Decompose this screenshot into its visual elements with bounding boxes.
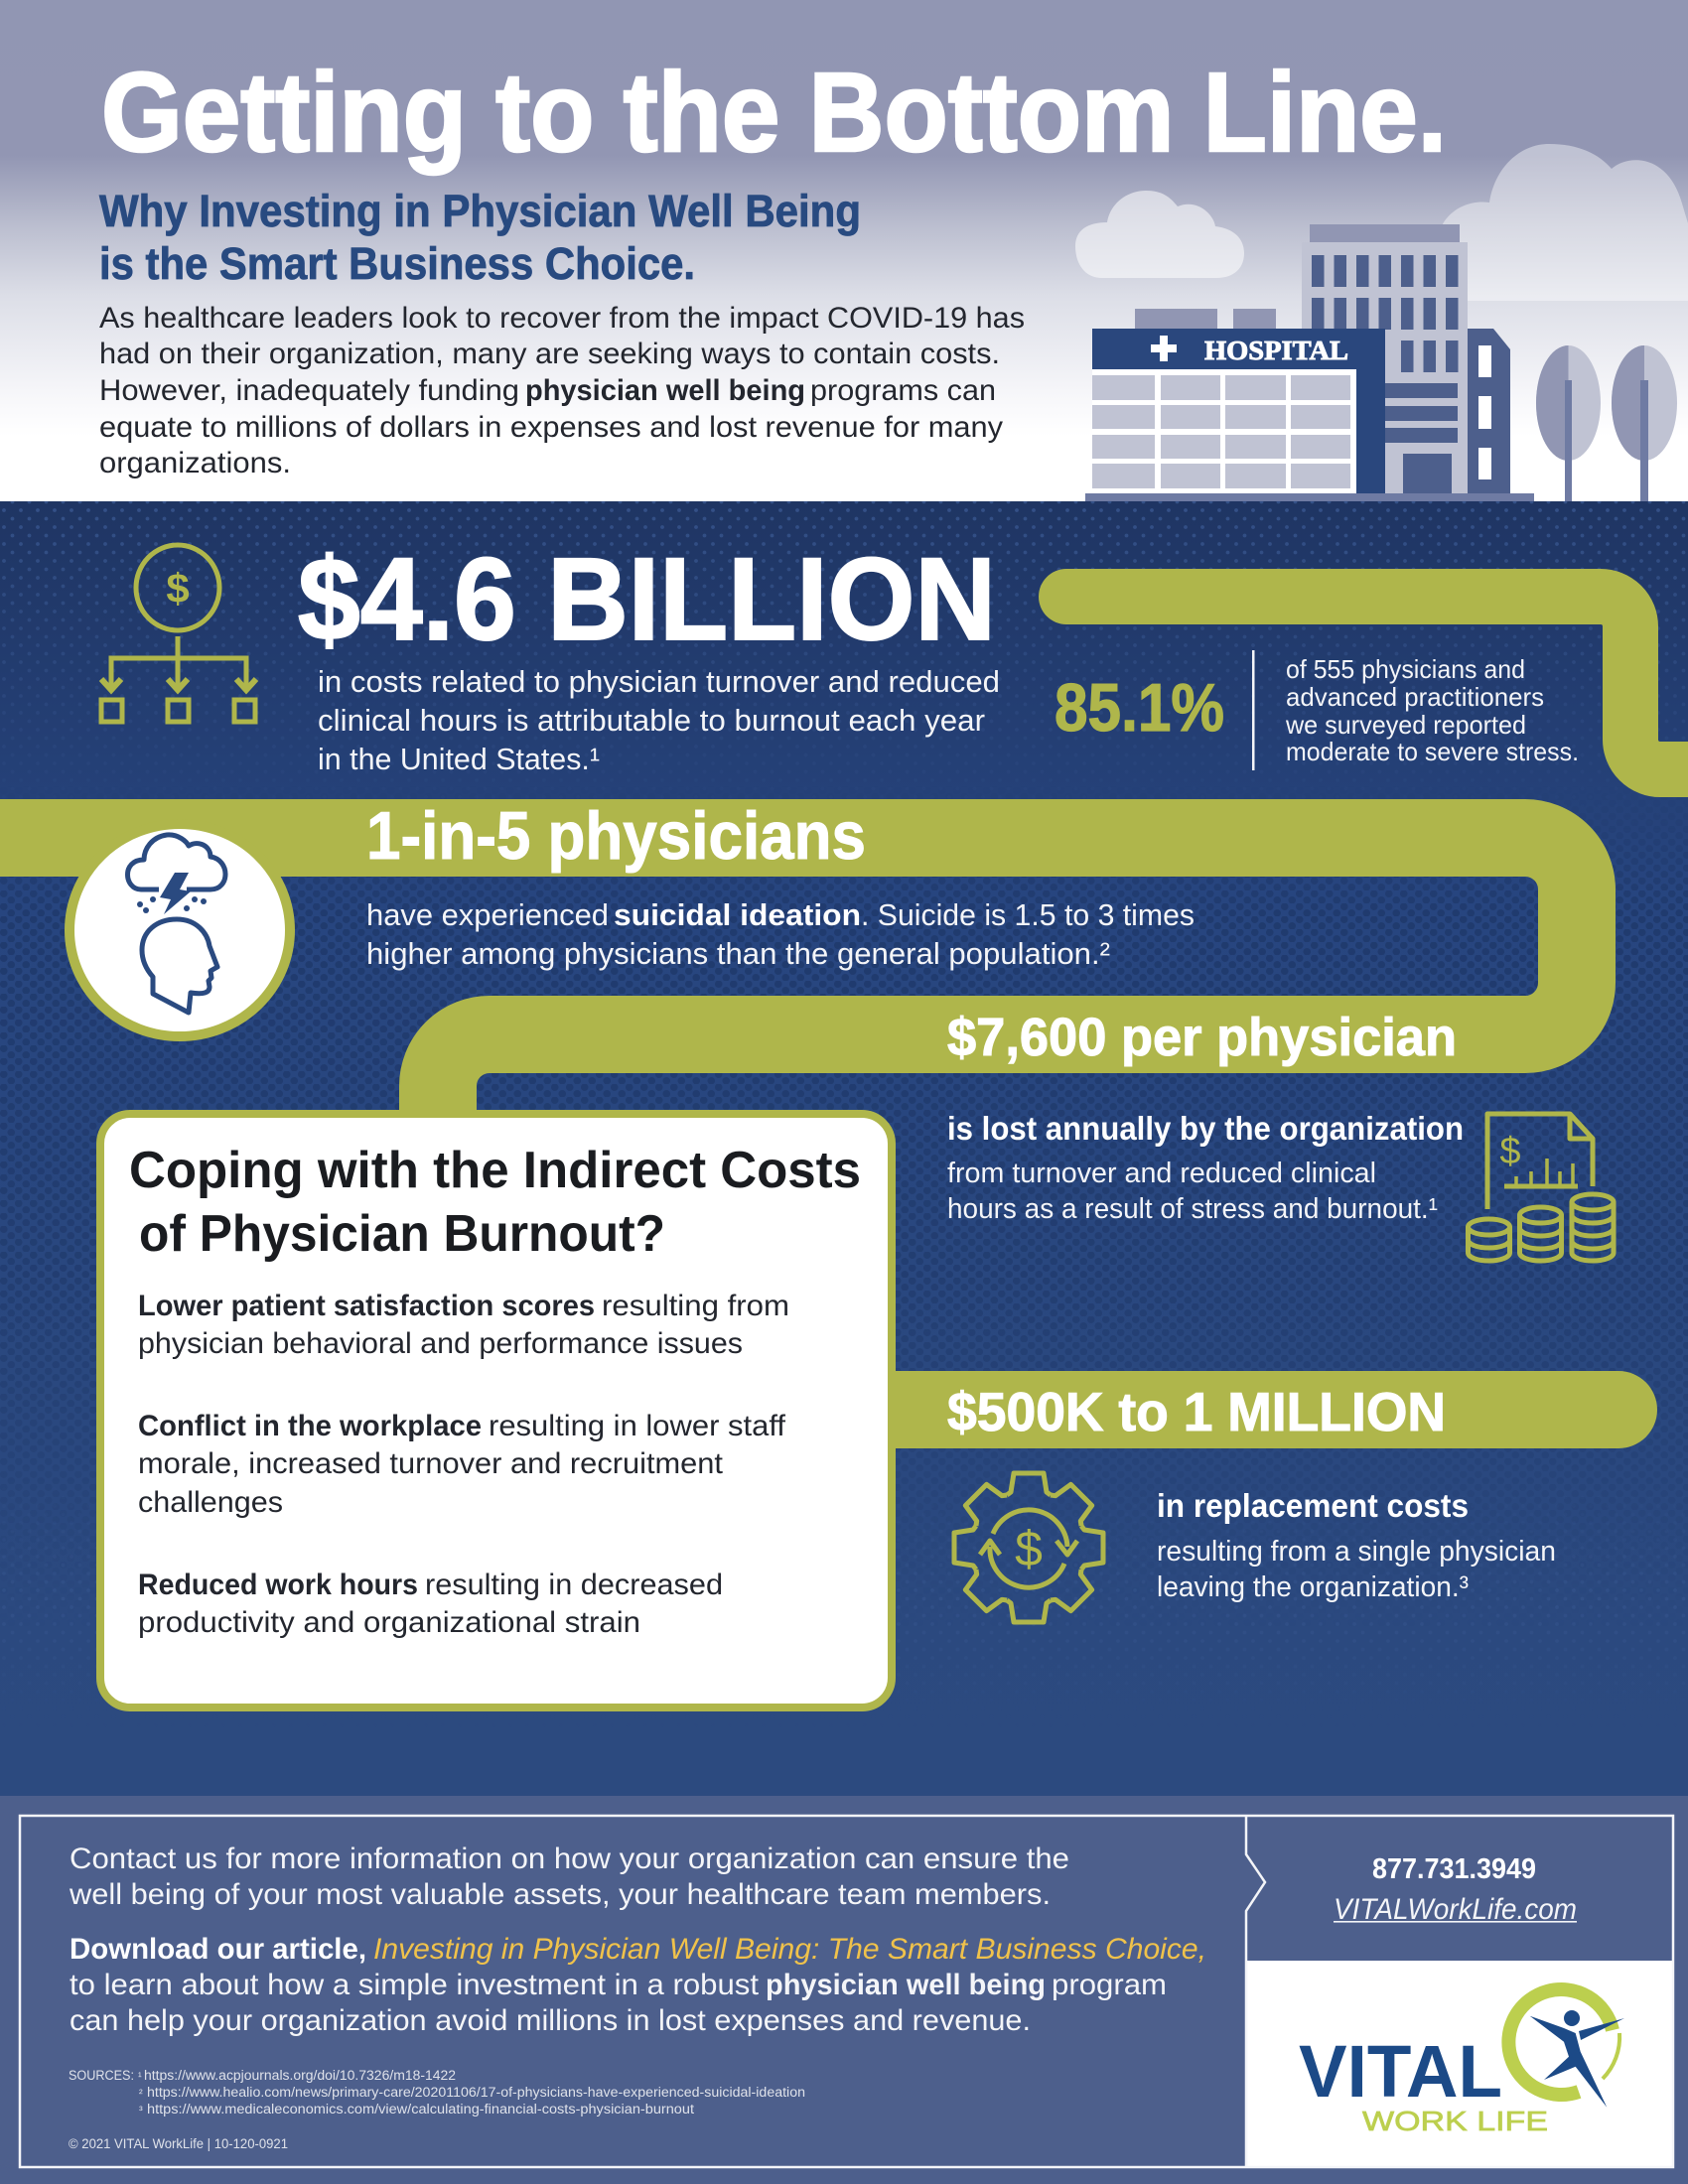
panel heading: of Physician Burnout? — [139, 1205, 665, 1263]
text: 85.1% description: advanced practitioners — [1286, 682, 1544, 712]
footer article text: physician well being — [766, 1969, 1046, 2001]
logo: VITAL WorkLife — [1299, 1989, 1624, 2136]
text: 7,600 description: is lost annually by the organization — [947, 1110, 1464, 1147]
illustration: trees — [1536, 345, 1677, 501]
item: conflict in the workplace — [138, 1410, 786, 1519]
footer article text: Download our article, — [70, 1933, 366, 1966]
ribbon 2 — [0, 838, 1577, 1132]
divider — [1252, 650, 1255, 770]
navy background panel — [0, 501, 1688, 1796]
footer contact text — [69, 1843, 1069, 1911]
text: replacement costs: resulting from a single physician — [1157, 1536, 1556, 1568]
footer article text — [70, 1933, 1206, 2037]
item: conflict in the workplace: challenges — [138, 1486, 283, 1519]
text: 85.1% description: we surveyed reported — [1285, 710, 1526, 740]
item: lower patient satisfaction: physician behavioral and performance issues — [138, 1327, 743, 1360]
sources: ² — [139, 2088, 143, 2100]
footer contact text: well being of your most valuable assets, your healthcare team members. — [69, 1878, 1051, 1911]
item: conflict in the workplace: Conflict in the workplace — [138, 1410, 482, 1442]
footer article text: can help your organization avoid millions in lost expenses and revenue. — [70, 2004, 1031, 2037]
phone number: 877.731.3949 — [1372, 1853, 1536, 1885]
footer panel — [0, 1796, 1688, 2184]
subtitle: Why Investing in Physician Well Being — [99, 186, 861, 236]
icon: dollar hierarchy: $ — [166, 565, 190, 612]
text: suicidal ideation: higher among physicians than the general population.² — [366, 936, 1110, 971]
icon: head under storm cloud — [70, 824, 290, 1036]
item: conflict in the workplace: resulting in lower staff — [489, 1410, 786, 1442]
item: reduced work hours — [138, 1569, 723, 1639]
item: lower patient satisfaction — [138, 1290, 789, 1360]
sources: ¹ — [138, 2071, 142, 2083]
stat: 7,600 per physician: $7,600 per physician — [947, 1008, 1457, 1067]
item: lower patient satisfaction: Lower patient satisfaction scores — [138, 1290, 595, 1322]
ribbon 1 — [1066, 597, 1688, 769]
text: 7,600 description: hours as a result of stress and burnout.¹ — [947, 1193, 1438, 1225]
text: 4.6 billion description: in the United States.¹ — [318, 742, 600, 776]
logo: VITAL WorkLife: WORK LIFE — [1362, 2106, 1548, 2136]
text: suicidal ideation: suicidal ideation — [614, 897, 861, 932]
sources: https://www.medicaleconomics.com/view/calculating-financial-costs-physician-burnout — [147, 2102, 694, 2116]
text: 85.1% description: moderate to severe stress. — [1286, 737, 1579, 766]
panel heading — [129, 1142, 861, 1263]
stat: 85.1%: 85.1% — [1055, 670, 1224, 746]
item: reduced work hours: Reduced work hours — [138, 1569, 418, 1601]
stat: 500K to 1 million: $500K to 1 MILLION — [947, 1381, 1446, 1442]
illustration: hospital: HOSPITAL — [1204, 336, 1348, 365]
intro text: physician well being — [525, 374, 805, 407]
text: replacement costs: leaving the organization.³ — [1157, 1571, 1469, 1603]
text: suicidal ideation — [366, 897, 1195, 971]
footer contact text: Contact us for more information on how your organization can ensure the — [70, 1843, 1069, 1875]
subtitle: is the Smart Business Choice. — [99, 238, 695, 289]
text: replacement costs — [1157, 1487, 1556, 1603]
icon: financial report and coins: $ — [1499, 1131, 1521, 1172]
cloud: large right — [1439, 144, 1688, 301]
text: 4.6 billion description — [318, 664, 1000, 776]
intro text: equate to millions of dollars in expenses and lost revenue for many — [99, 411, 1003, 444]
intro text — [99, 302, 1025, 479]
copyright: © 2021 VITAL WorkLife | 10-120-0921 — [69, 2136, 288, 2151]
text: 4.6 billion description: in costs related to physician turnover and reduced — [318, 664, 1000, 699]
footer article text: Investing in Physician Well Being: The Smart Business Choice, — [373, 1933, 1206, 1966]
intro text: However, inadequately funding — [99, 374, 519, 407]
sources: SOURCES: — [69, 2068, 134, 2083]
stat: 1-in-5 physicians: 1-in-5 physicians — [366, 798, 866, 874]
item: conflict in the workplace: morale, increased turnover and recruitment — [138, 1447, 724, 1480]
text: 85.1% description: of 555 physicians and — [1286, 654, 1525, 684]
intro text: had on their organization, many are seeking ways to contain costs. — [99, 338, 1000, 370]
intro text: organizations. — [99, 447, 291, 479]
text: 4.6 billion description: clinical hours is attributable to burnout each year — [318, 703, 985, 738]
icon: dollar hierarchy — [101, 545, 256, 722]
header background — [0, 0, 1688, 501]
panel heading: Coping with the Indirect Costs — [129, 1142, 861, 1199]
illustration: hospital — [1085, 224, 1534, 501]
subtitle — [99, 186, 861, 289]
icon: gear with dollar — [954, 1473, 1103, 1622]
text: suicidal ideation: have experienced — [366, 897, 609, 932]
item: reduced work hours: productivity and organizational strain — [138, 1606, 640, 1639]
text: replacement costs: in replacement costs — [1157, 1487, 1469, 1524]
sources: ³ — [139, 2105, 143, 2116]
text: 85.1% description — [1285, 654, 1579, 766]
panel: indirect costs — [100, 1114, 892, 1707]
ribbon 3 — [854, 1371, 1657, 1448]
intro text: As healthcare leaders look to recover from the impact COVID-19 has — [99, 302, 1025, 335]
logo: VITAL WorkLife: VITAL — [1299, 2030, 1502, 2113]
footer article text: program — [1052, 1969, 1167, 2001]
title: Getting to the Bottom Line. — [101, 50, 1447, 175]
text: suicidal ideation: . Suicide is 1.5 to 3 times — [861, 897, 1195, 932]
intro text: programs can — [810, 374, 996, 407]
stat: 4.6 billion: $4.6 BILLION — [298, 534, 996, 665]
sources — [69, 2068, 805, 2116]
footer article text: to learn about how a simple investment in a robust — [70, 1969, 760, 2001]
item: lower patient satisfaction: resulting from — [602, 1290, 789, 1322]
icon: financial report and coins — [1468, 1114, 1614, 1261]
sources: https://www.healio.com/news/primary-care/20201106/17-of-physicians-have-experienced-suicidal-ideation — [147, 2085, 805, 2100]
sources: https://www.acpjournals.org/doi/10.7326/m18-1422 — [144, 2068, 456, 2083]
cloud: small — [1075, 191, 1244, 278]
website link: VITALWorkLife.com — [1334, 1893, 1577, 1926]
item: reduced work hours: resulting in decreased — [425, 1569, 723, 1601]
icon: gear with dollar: $ — [1015, 1521, 1043, 1576]
text: 7,600 description: from turnover and reduced clinical — [947, 1158, 1376, 1189]
text: 7,600 description — [947, 1110, 1464, 1225]
